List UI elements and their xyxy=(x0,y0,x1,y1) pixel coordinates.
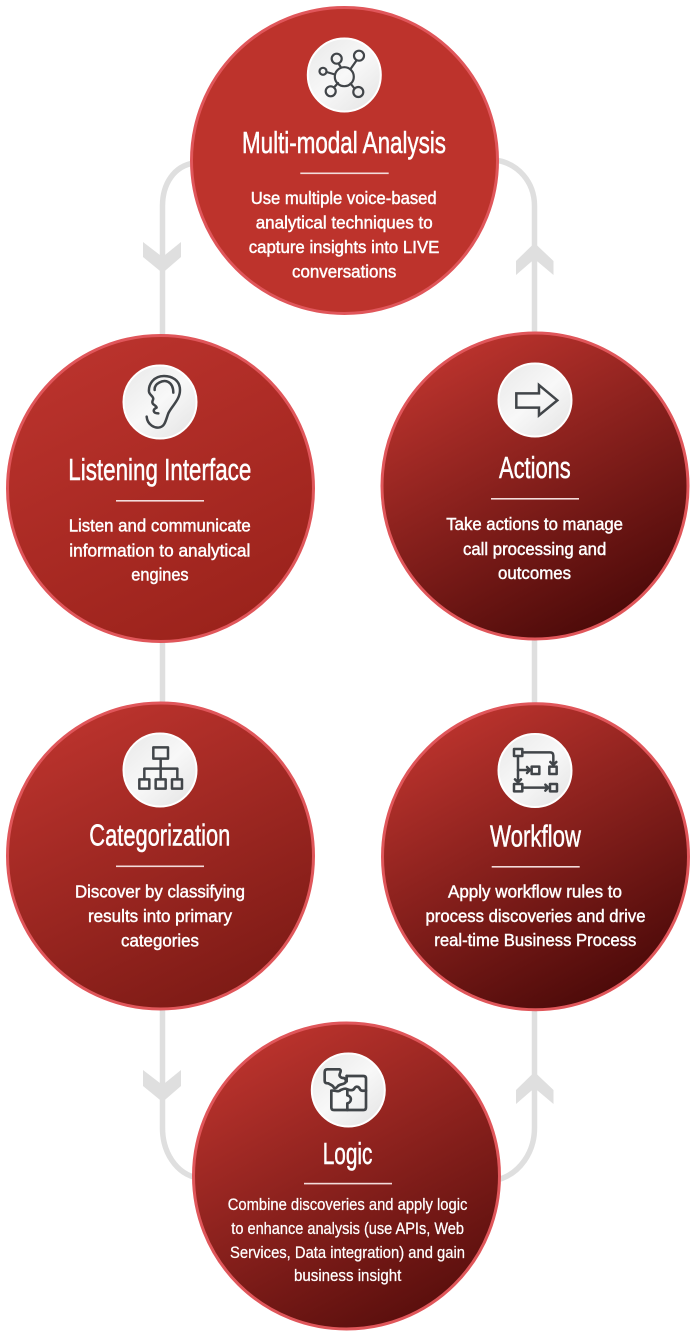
heading: Workflow xyxy=(490,818,581,854)
description: Discover by classifying xyxy=(75,882,245,902)
icon: puzzle pieces xyxy=(325,1069,366,1110)
panel: Logic xyxy=(194,1023,500,1329)
panel: Categorization xyxy=(8,703,314,1009)
icon: ear xyxy=(147,376,180,428)
description: to enhance analysis (use APIs, Web xyxy=(231,1220,464,1238)
connector: left path down from Multi-modal Analysis xyxy=(143,163,198,1178)
panel: Workflow xyxy=(382,704,688,1010)
description: conversations xyxy=(292,262,397,282)
description: results into primary xyxy=(88,906,232,926)
icon: hierarchy xyxy=(139,747,182,789)
description xyxy=(446,514,623,583)
panel: Actions xyxy=(382,333,688,639)
panel: Listening Interface xyxy=(8,336,314,642)
description: capture insights into LIVE xyxy=(249,237,439,257)
description: Combine discoveries and apply logic xyxy=(228,1196,467,1214)
description: Services, Data integration) and gain xyxy=(230,1244,465,1262)
description xyxy=(75,882,245,950)
connector: right path up to Multi-modal Analysis xyxy=(495,160,554,1180)
heading: Categorization xyxy=(89,818,230,852)
description: real-time Business Process xyxy=(434,930,637,950)
description xyxy=(69,516,251,584)
panel: Multi-modal Analysis xyxy=(192,8,498,314)
icon: right arrow xyxy=(516,385,557,415)
heading: Listening Interface xyxy=(68,452,251,487)
description: business insight xyxy=(294,1267,402,1285)
description: outcomes xyxy=(498,563,571,583)
heading: Multi-modal Analysis xyxy=(242,125,446,160)
description: Apply workflow rules to xyxy=(448,882,622,902)
description xyxy=(249,188,439,282)
description: call processing and xyxy=(463,539,606,559)
description: Take actions to manage xyxy=(446,514,623,534)
icon: workflow diagram xyxy=(514,749,557,791)
description: categories xyxy=(121,930,199,950)
description: engines xyxy=(131,564,189,584)
description: Use multiple voice-based xyxy=(251,188,437,208)
description: Listen and communicate xyxy=(69,516,251,536)
heading: Actions xyxy=(499,450,571,485)
icon: network hub xyxy=(320,51,364,97)
description xyxy=(426,882,646,950)
description xyxy=(228,1196,467,1285)
heading: Logic xyxy=(323,1136,372,1171)
description: analytical techniques to xyxy=(256,212,433,232)
description: information to analytical xyxy=(69,540,250,560)
description: process discoveries and drive xyxy=(426,906,646,926)
